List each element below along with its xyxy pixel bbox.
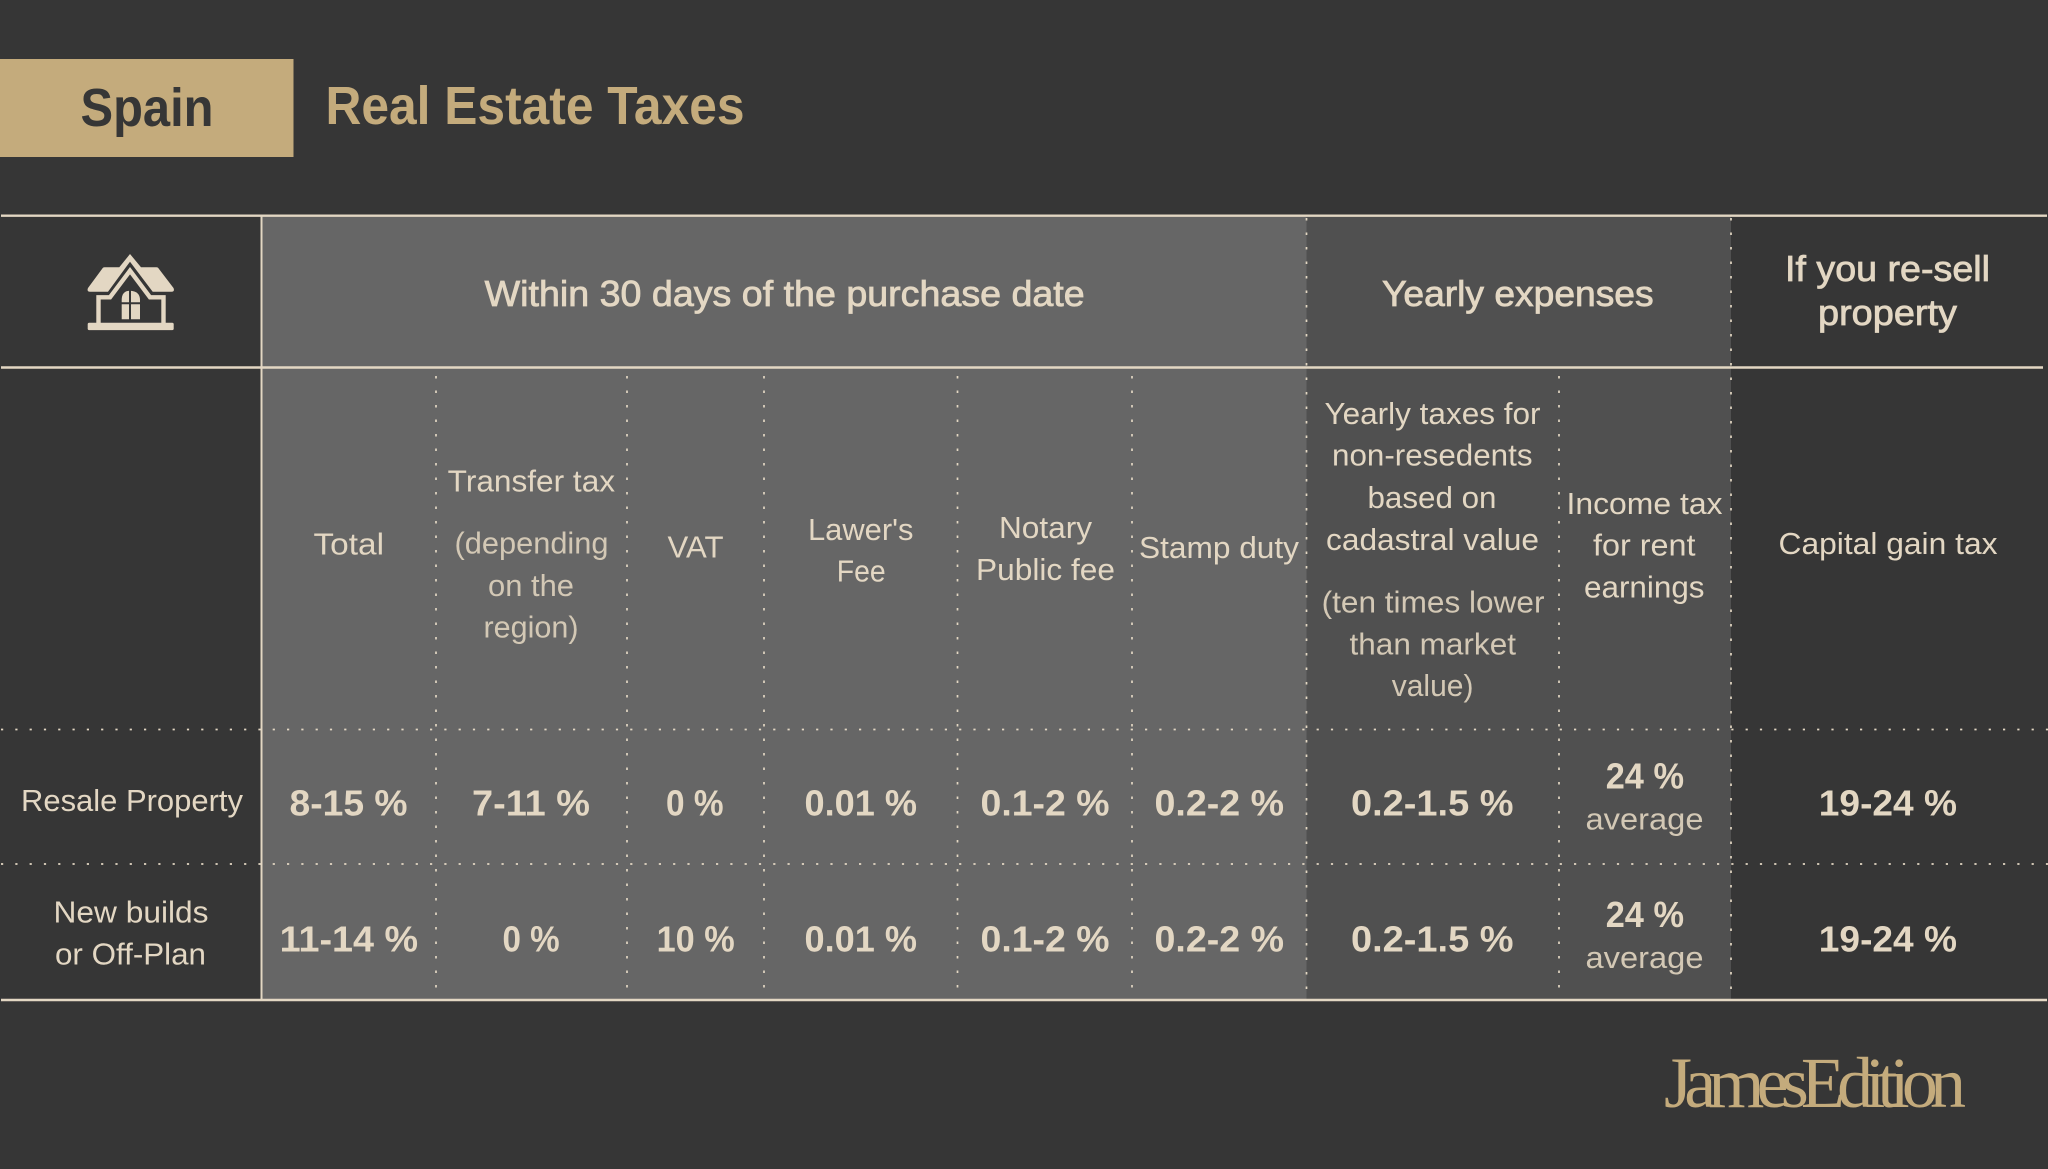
icon: house — [88, 254, 174, 330]
row: new builds or off-plan: 0 % — [502, 919, 560, 960]
column header: income tax for rent earnings — [1566, 486, 1723, 604]
row: new builds or off-plan: average — [1586, 940, 1704, 975]
logo: JamesEdition: JamesEdition — [1664, 1043, 1966, 1123]
row label: new builds or off-plan: New builds — [54, 894, 208, 929]
column header: Transfer tax: region) — [484, 610, 578, 645]
row: new builds or off-plan: 24 % — [1606, 894, 1684, 935]
country badge: Spain: Spain — [80, 78, 214, 138]
section header: yearly expenses: Yearly expenses — [1382, 273, 1654, 314]
column header: Notary Public fee: Notary — [999, 510, 1093, 545]
column header: yearly taxes for non-residents: based on — [1368, 480, 1496, 515]
column header: VAT: VAT — [668, 530, 724, 565]
column header: yearly taxes for non-residents: value) — [1392, 668, 1474, 703]
panel: purchase-date taxes background — [262, 216, 1306, 1000]
column header: Lawer's Fee: Lawer's — [808, 512, 914, 547]
row: resale property: 0.01 % — [804, 783, 917, 824]
row: resale property: 19-24 % — [1819, 783, 1957, 824]
row: resale property: 0.2-1.5 % — [1351, 783, 1514, 824]
column header: Transfer tax: on the — [488, 568, 574, 603]
column header: yearly taxes for non-residents: cadastral value — [1326, 522, 1539, 557]
column header: yearly taxes for non-residents — [1322, 396, 1544, 703]
row: new builds or off-plan: 0.01 % — [804, 919, 917, 960]
row: new builds or off-plan: 10 % — [657, 919, 735, 960]
row label: new builds or off-plan — [54, 894, 208, 971]
row: resale property: 0 % — [666, 783, 724, 824]
row: resale property: 24 % — [1606, 755, 1684, 796]
title: Real Estate Taxes — [326, 76, 744, 136]
column header: Transfer tax: Transfer tax — [448, 464, 616, 499]
column header: Total: Total — [314, 526, 384, 561]
row: resale property: 0.2-2 % — [1154, 783, 1284, 824]
column header: Lawer's Fee: Fee — [837, 554, 886, 589]
row: new builds or off-plan — [54, 894, 1957, 975]
section header: within 30 days: Within 30 days of the purchase date — [485, 273, 1085, 314]
column header: Transfer tax: (depending — [454, 525, 608, 560]
section header: if you re-sell property — [1785, 248, 1990, 333]
column header: Notary Public fee: Public fee — [976, 552, 1115, 587]
column header: income tax for rent earnings: Income tax — [1566, 486, 1723, 521]
column header: Stamp duty: Stamp duty — [1139, 530, 1299, 565]
column header: yearly taxes for non-residents: non-resedents — [1332, 438, 1532, 473]
row label: resale property: Resale Property — [21, 783, 243, 818]
row: resale property: 8-15 % — [290, 783, 408, 824]
section header: if you re-sell property: If you re-sell — [1785, 248, 1990, 289]
column header: capital gain tax: Capital gain tax — [1778, 526, 1998, 561]
column header: yearly taxes for non-residents: (ten times lower — [1322, 584, 1544, 620]
column header: Lawer's Fee — [808, 512, 914, 589]
row: new builds or off-plan: 11-14 % — [280, 919, 418, 960]
row: resale property: 7-11 % — [472, 783, 590, 824]
row: new builds or off-plan: 0.1-2 % — [980, 919, 1110, 960]
column header: Notary Public fee — [976, 510, 1115, 587]
row: new builds or off-plan: 0.2-2 % — [1154, 919, 1284, 960]
panel: yearly expenses background — [1306, 216, 1731, 1000]
column header: yearly taxes for non-residents: Yearly taxes for — [1324, 396, 1540, 431]
row: resale property — [21, 755, 1957, 836]
row: new builds or off-plan: 0.2-1.5 % — [1351, 919, 1514, 960]
column header: income tax for rent earnings: for rent — [1593, 528, 1696, 563]
row: resale property: average — [1586, 801, 1704, 836]
row: resale property: 0.1-2 % — [980, 783, 1110, 824]
row: new builds or off-plan: 19-24 % — [1819, 919, 1957, 960]
section header: if you re-sell property: property — [1818, 292, 1957, 333]
row label: new builds or off-plan: or Off-Plan — [55, 936, 206, 971]
column header: yearly taxes for non-residents: than market — [1350, 627, 1516, 662]
country badge: Spain — [0, 59, 294, 157]
column header: income tax for rent earnings: earnings — [1584, 569, 1704, 604]
column header: Transfer tax — [448, 464, 616, 645]
